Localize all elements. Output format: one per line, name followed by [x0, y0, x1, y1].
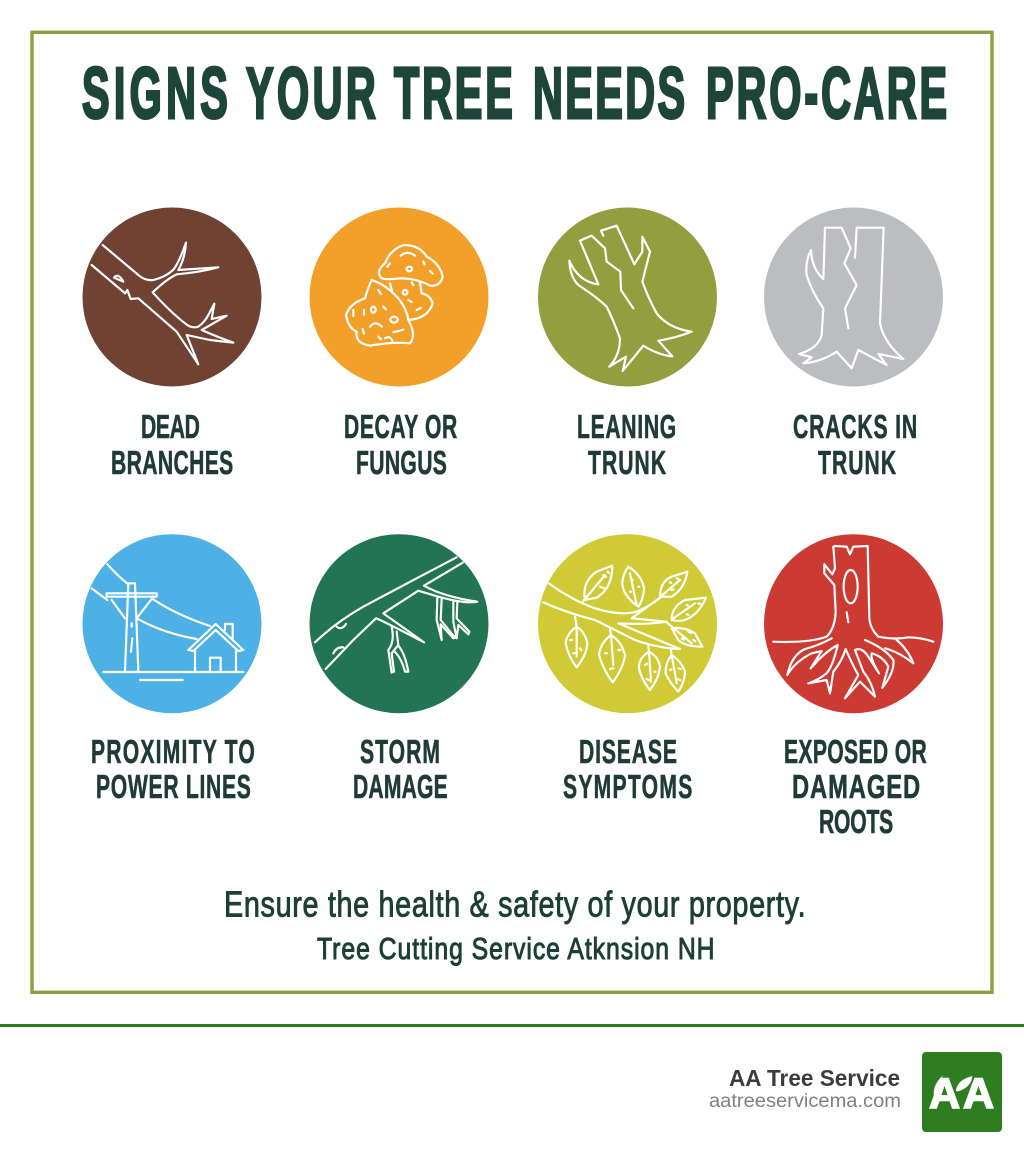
title	[82, 54, 947, 134]
label: disease symptoms: DISEASE	[579, 733, 677, 770]
panel: proximity to power lines	[82, 534, 262, 805]
logo	[922, 1052, 1002, 1132]
footer divider	[0, 1024, 1024, 1027]
label: cracks in trunk: CRACKS IN	[793, 408, 917, 445]
label: dead branches: DEAD	[141, 408, 200, 445]
label: disease symptoms: SYMPTOMS	[563, 768, 692, 805]
label: storm damage: STORM	[360, 733, 440, 770]
icon: fungus	[310, 208, 488, 386]
label: leaning trunk	[577, 408, 676, 481]
label: dead branches: BRANCHES	[111, 444, 233, 481]
frame	[32, 32, 992, 992]
title: NEEDS	[533, 54, 685, 134]
label: storm damage: DAMAGE	[353, 768, 448, 805]
icon: cracked trunk	[764, 208, 943, 386]
logo: AA	[929, 1070, 994, 1118]
icon: exposed roots	[764, 534, 943, 713]
icon: diseased leaves	[538, 534, 717, 713]
title: PRO-CARE	[706, 54, 947, 134]
icon: leaning trunk	[538, 208, 717, 386]
label: leaning trunk: LEANING	[577, 408, 676, 445]
label: exposed or damaged roots	[784, 733, 927, 840]
icon: storm damaged branch	[310, 534, 488, 713]
panel: disease symptoms	[538, 534, 717, 805]
label: proximity to power lines: PROXIMITY TO	[91, 733, 255, 770]
label: dead branches	[111, 408, 233, 481]
label: disease symptoms	[563, 733, 692, 805]
label: decay or fungus	[344, 408, 457, 481]
footer brand name: AA Tree Service	[729, 1065, 900, 1091]
label: exposed or damaged roots: EXPOSED OR	[784, 733, 927, 770]
icon: power pole and house	[82, 534, 262, 713]
panel: decay or fungus	[310, 208, 488, 481]
title: SIGNS	[82, 54, 228, 134]
label: cracks in trunk	[793, 408, 917, 481]
panel: dead branches	[82, 208, 262, 481]
panel: exposed or damaged roots	[764, 534, 943, 840]
label: cracks in trunk: TRUNK	[818, 444, 896, 481]
icon: dead branch	[82, 208, 262, 386]
panel: cracks in trunk	[764, 208, 943, 481]
tagline: Ensure the health & safety of your property.	[224, 883, 806, 924]
label: leaning trunk: TRUNK	[588, 444, 666, 481]
title: TREE	[394, 54, 513, 134]
panel: storm damage	[310, 534, 488, 805]
label: decay or fungus: DECAY OR	[344, 408, 457, 445]
label: proximity to power lines	[91, 733, 255, 805]
label: exposed or damaged roots: ROOTS	[819, 803, 893, 840]
label: exposed or damaged roots: DAMAGED	[792, 769, 920, 806]
label: decay or fungus: FUNGUS	[356, 444, 447, 481]
footer website: aatreeservicema.com	[709, 1091, 901, 1112]
subtitle: Tree Cutting Service Atknsion NH	[317, 931, 715, 966]
panel: leaning trunk	[538, 208, 717, 481]
label: storm damage	[353, 733, 448, 805]
label: proximity to power lines: POWER LINES	[96, 768, 251, 805]
title: YOUR	[246, 54, 376, 134]
